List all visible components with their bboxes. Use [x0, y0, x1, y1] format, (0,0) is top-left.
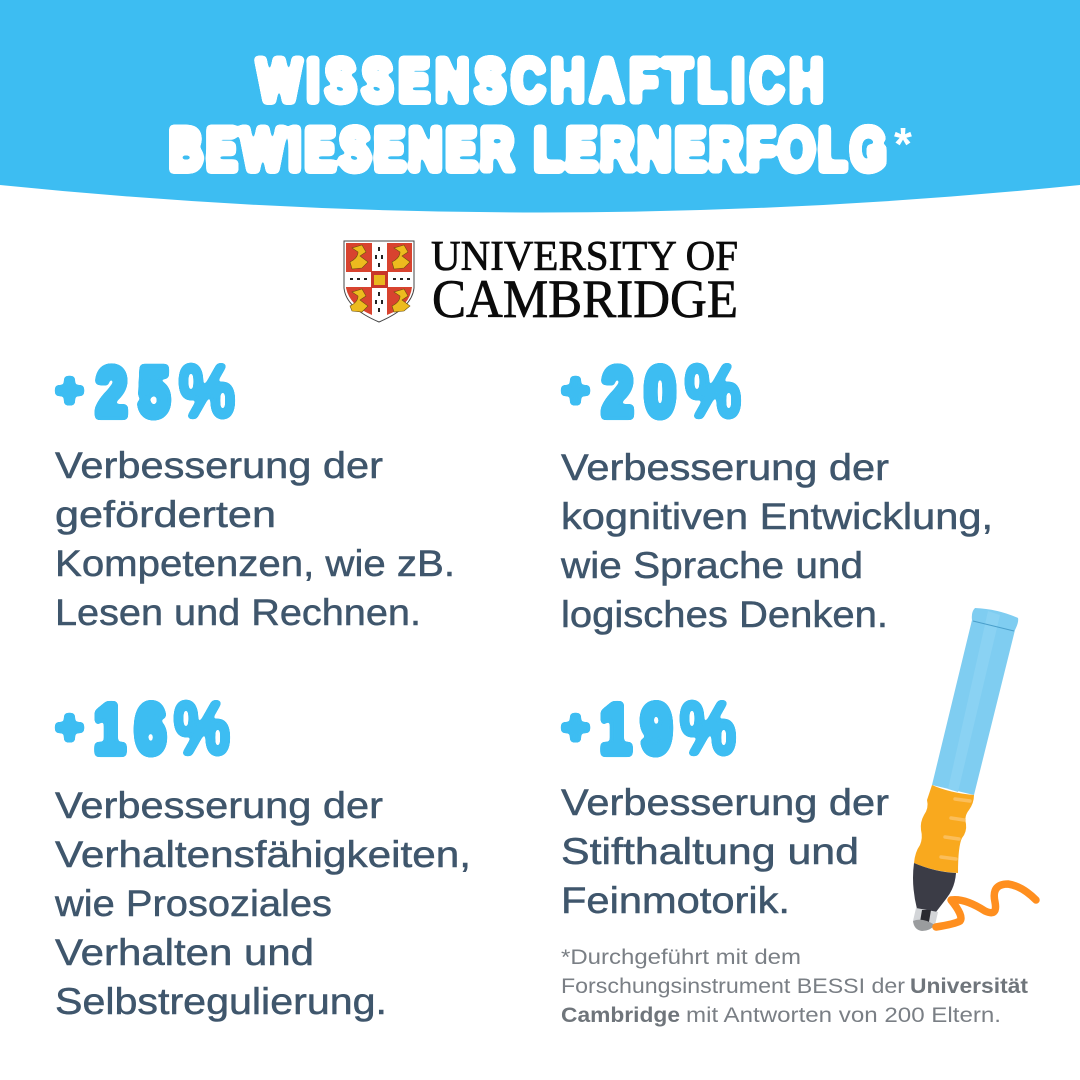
description: Feinmotorik.: [561, 880, 790, 921]
black tip: [913, 863, 956, 912]
header banner: [0, 0, 1080, 212]
icon: Cambridge shield: [344, 241, 414, 322]
description: [561, 782, 889, 921]
description: geförderten: [55, 494, 276, 535]
stat number: [56, 689, 230, 769]
footnote: mit Antworten von 200 Eltern.: [686, 1004, 1001, 1027]
footnote: *Durchgeführt mit dem: [561, 946, 801, 969]
description: Kompetenzen, wie zB.: [55, 543, 455, 584]
description: Lesen und Rechnen.: [55, 592, 421, 633]
logo text: CAMBRIDGE: [432, 269, 738, 329]
stat number: +: [562, 364, 589, 416]
description: Verbesserung der: [55, 445, 383, 486]
footnote: Forschungsinstrument BESSI der: [561, 975, 905, 998]
title: WISSENSCHAFTLICH: [257, 47, 823, 114]
mesh tip: [913, 920, 935, 931]
description: [54, 785, 471, 1022]
stat number: 20: [602, 354, 676, 431]
description: kognitiven Entwicklung,: [561, 496, 993, 537]
title: [169, 47, 912, 183]
description: Verbesserung der: [561, 782, 889, 823]
orange grip: [914, 785, 974, 873]
footnote: Universität: [910, 975, 1028, 998]
footnote: Cambridge: [561, 1004, 680, 1027]
orange scribble: [936, 884, 1036, 927]
stat number: [56, 352, 235, 432]
stat number: 16: [94, 691, 166, 768]
description: Selbstregulierung.: [55, 981, 387, 1022]
stat number: 25: [96, 354, 170, 431]
stat number: %: [174, 689, 230, 769]
stat number: %: [680, 689, 736, 769]
stat block: +25%: [55, 352, 455, 633]
description: Stifthaltung und: [561, 831, 859, 872]
stat number: +: [56, 701, 83, 753]
pen barrel: [932, 608, 1018, 795]
logo text: [431, 234, 738, 329]
description: wie Prosoziales: [54, 883, 332, 924]
University of Cambridge logo: [344, 234, 738, 329]
description: wie Sprache und: [560, 545, 863, 586]
stat number: 19: [600, 691, 672, 768]
description: [560, 447, 993, 635]
title: *: [894, 118, 912, 170]
stat number: %: [685, 352, 741, 432]
stat number: +: [562, 701, 589, 753]
stat number: [562, 689, 736, 769]
stat block: +20%: [560, 352, 993, 635]
icon: stylus pen with scribble: [913, 608, 1036, 931]
logo text: UNIVERSITY OF: [431, 234, 738, 280]
footnote: [561, 946, 1028, 1027]
stat number: +: [56, 364, 83, 416]
description: Verbesserung der: [561, 447, 889, 488]
description: Verhalten und: [55, 932, 314, 973]
description: [55, 445, 455, 633]
title: BEWIESENER LERNERFOLG: [169, 116, 887, 183]
metal collar: [913, 908, 938, 925]
description: logisches Denken.: [561, 594, 888, 635]
stat number: %: [179, 352, 235, 432]
description: Verhaltensfähigkeiten,: [55, 834, 471, 875]
stat block: +19%: [561, 689, 889, 921]
description: Verbesserung der: [55, 785, 383, 826]
stat number: [562, 352, 741, 432]
stat block: +16%: [54, 689, 471, 1022]
